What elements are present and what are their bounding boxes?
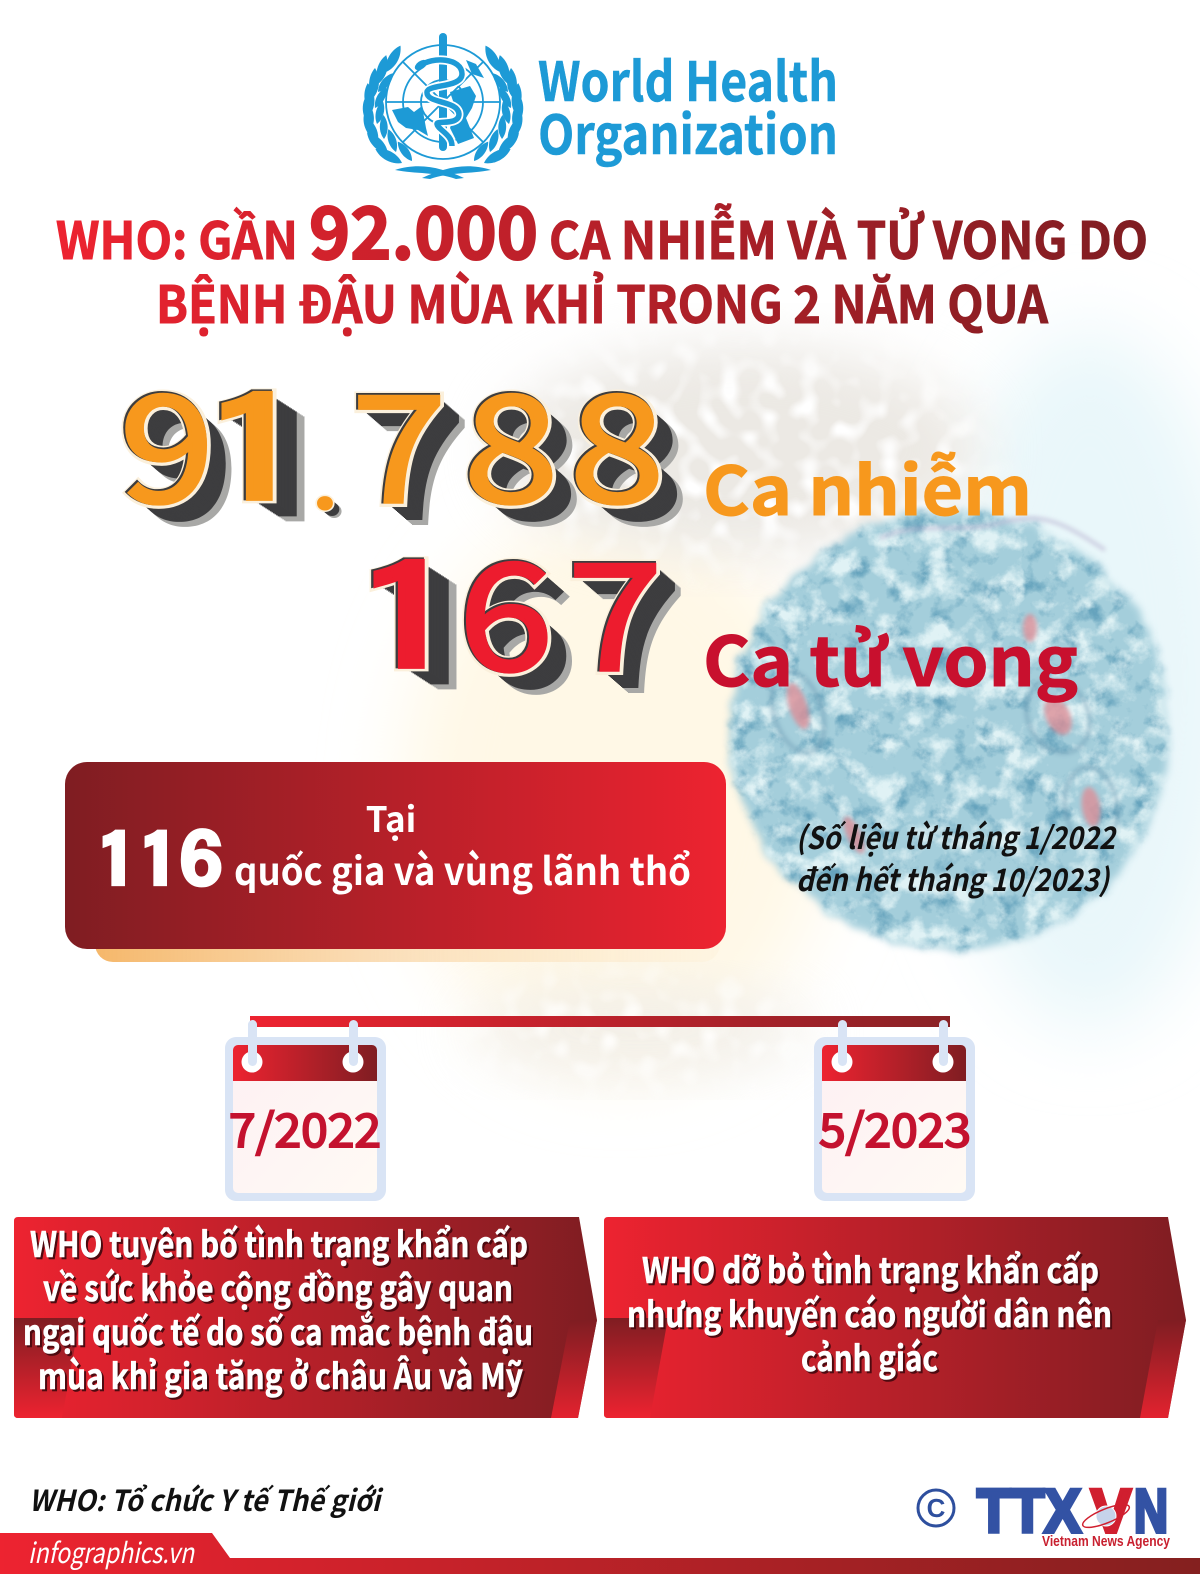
text: 6 bbox=[459, 498, 553, 713]
calendar: 7/2022: 7/2022 bbox=[229, 1095, 381, 1161]
logo: TTXVN: Vietnam News Agency bbox=[1042, 1533, 1171, 1550]
arrow panel: July 2022 declaration: ngại quốc tế do số ca mắc bệnh đậu bbox=[23, 1305, 533, 1356]
title: CA NHIỄM VÀ TỬ VONG DO bbox=[549, 200, 1148, 274]
arrow panel: July 2022 declaration: WHO tuyên bố tình trạng khẩn cấp bbox=[30, 1217, 528, 1268]
panel: 116 countries: quốc gia và vùng lãnh thổ bbox=[234, 841, 691, 896]
arrow panel: May 2023 lifted: cảnh giác bbox=[801, 1331, 938, 1382]
icon: WHO emblem bbox=[359, 33, 527, 179]
panel: 116 countries bbox=[65, 762, 726, 962]
panel: 116 countries: Tại bbox=[366, 792, 416, 843]
logo: TTXVN: C bbox=[927, 1493, 946, 1523]
title: WHO: GẦN bbox=[56, 200, 298, 274]
calendar: 5/2023 bbox=[814, 1020, 975, 1201]
footnote: WHO: Tổ chức Y tế Thế giới bbox=[29, 1478, 384, 1520]
text: 7 bbox=[568, 498, 662, 713]
arrow panel: May 2023 lifted: WHO dỡ bỏ tình trạng khẩn cấp bbox=[642, 1243, 1099, 1294]
note: data period: (Số liệu từ tháng 1/2022 bbox=[796, 813, 1117, 858]
logo: TTXVN: TTX bbox=[977, 1477, 1081, 1545]
labels: case counts: Ca nhiễm bbox=[703, 438, 1032, 535]
text: 8 bbox=[464, 330, 558, 545]
note: data period: đến hết tháng 10/2023) bbox=[796, 855, 1111, 900]
calendar: 7/2022 bbox=[225, 1020, 386, 1201]
footer bar: infographics.vn: infographics.vn bbox=[28, 1532, 196, 1572]
arrow panel: July 2022 declaration: về sức khỏe cộng đồng gây quan bbox=[43, 1261, 513, 1312]
panel: 116 countries: 116 bbox=[96, 824, 222, 896]
text: 9 bbox=[120, 330, 214, 545]
calendar: 5/2023: 5/2023 bbox=[819, 1095, 971, 1161]
title: BỆNH ĐẬU MÙA KHỈ TRONG 2 NĂM QUA bbox=[156, 264, 1048, 338]
big number: 91.788 bbox=[120, 330, 683, 545]
timeline bar bbox=[250, 1016, 950, 1027]
logo wordmark: World Health bbox=[538, 38, 838, 117]
logo wordmark: Organization bbox=[538, 91, 838, 170]
arrow panel: July 2022 declaration: mùa khỉ gia tăng ở châu Âu và Mỹ bbox=[38, 1349, 523, 1400]
logo: TTXVN: N bbox=[1134, 1477, 1168, 1545]
labels: case counts bbox=[703, 438, 1078, 706]
text: 8 bbox=[570, 330, 664, 545]
logo: TTXVN: V bbox=[1091, 1477, 1131, 1545]
title: 92.000 bbox=[309, 175, 538, 280]
text: 1 bbox=[350, 543, 466, 693]
text: 1 bbox=[198, 375, 314, 525]
arrow panel: May 2023 lifted: nhưng khuyến cáo người dân nên bbox=[627, 1287, 1112, 1338]
big number: 167 bbox=[350, 498, 681, 713]
text: . bbox=[312, 429, 338, 530]
logo wordmark bbox=[538, 38, 838, 170]
title bbox=[56, 175, 1148, 338]
logo: World Health Organization bbox=[362, 33, 838, 179]
note: data period bbox=[796, 813, 1117, 900]
labels: case counts: Ca tử vong bbox=[703, 607, 1078, 706]
text: 7 bbox=[352, 330, 446, 545]
